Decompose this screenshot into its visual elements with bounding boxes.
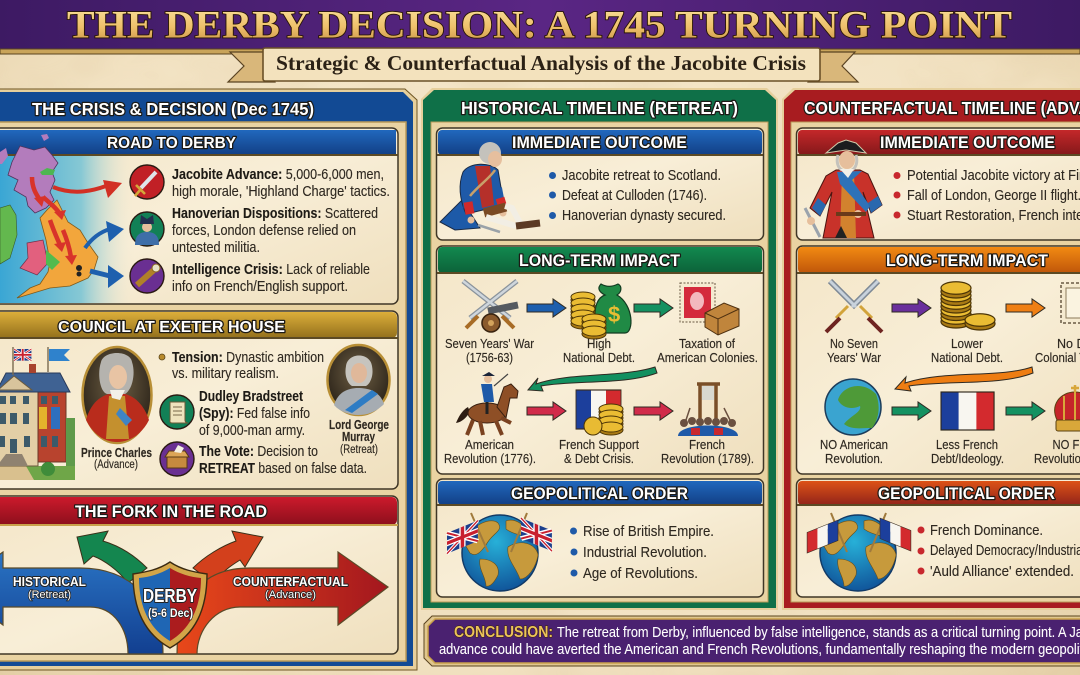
label: taxation (657, 336, 758, 365)
sub-panel: road to derby (0, 128, 398, 304)
icon: spyglass (130, 259, 164, 293)
label: seven years war: (1756-63) (466, 350, 513, 365)
heading: COUNCIL AT EXETER HOUSE (58, 319, 285, 336)
label: lower national debt: Lower (951, 336, 984, 351)
text: hanoverian dispositions (172, 206, 378, 256)
heading: ROAD TO DERBY (107, 135, 237, 152)
icon: coin stack (941, 282, 995, 330)
label: taxation: Taxation of (679, 336, 735, 351)
label: lord george murray (329, 417, 389, 456)
illustration: defeated soldier (440, 142, 540, 232)
arrow: green (634, 299, 673, 317)
text: jacobite advance (172, 167, 390, 200)
arrow: counterfactual road (177, 552, 388, 654)
label: seven years war (445, 336, 535, 365)
heading: GEOPOLITICAL ORDER (511, 485, 688, 503)
label: french support: & Debt Crisis. (564, 451, 634, 466)
subtitle: Strategic & Counterfactual Analysis of the Jacobite Crisis (276, 51, 806, 75)
text: intelligence crisis: info on French/English support. (172, 279, 348, 295)
arrow: orange (1006, 299, 1045, 317)
label: french revolution (661, 437, 754, 466)
label: french revolution: Revolution (1789). (661, 451, 754, 466)
bullet list: Industrial Revolution. (583, 545, 707, 561)
label: prince charles (81, 445, 152, 471)
icon: broken swords (826, 281, 882, 332)
conclusion banner (424, 616, 1080, 666)
road label: counterfactual: (Advance) (265, 589, 316, 601)
road label: historical (13, 574, 86, 601)
sub-panel: council at exeter house (0, 311, 398, 489)
label: seven years war: Seven Years' War (445, 336, 535, 351)
shield: derby: (5-6 Dec) (148, 606, 193, 620)
conclusion text (439, 624, 1080, 658)
icon: money bag and coins: $ (608, 302, 620, 327)
icon: ballot box (160, 442, 194, 476)
arrow: red up-right (193, 531, 263, 583)
icon: horse and rider (456, 372, 518, 435)
label: lower national debt (931, 336, 1003, 365)
portrait: lord george murray (328, 345, 390, 415)
panel heading: HISTORICAL TIMELINE (RETREAT) (461, 98, 738, 118)
panel: historical timeline (421, 88, 778, 610)
icon: money bag and coins (571, 284, 631, 339)
text: jacobite advance: Jacobite Advance: 5,000-6,000 men, (172, 167, 384, 183)
road label: historical: (Retreat) (28, 589, 71, 601)
arrow: blue (527, 299, 566, 317)
arrow: red 2 (634, 402, 673, 420)
heading: IMMEDIATE OUTCOME (880, 134, 1055, 152)
label: no american revolution (820, 437, 888, 466)
icon: globe with british flags (447, 513, 552, 591)
shield: derby (133, 562, 207, 648)
text: intelligence crisis (172, 262, 370, 295)
label: american revolution: American (465, 437, 514, 452)
text: the vote: RETREAT based on false data. (199, 461, 367, 477)
label: less french debt: Less French (936, 437, 998, 452)
bullet list: Defeat at Culloden (1746). (562, 188, 707, 204)
label: less french debt (931, 437, 1004, 466)
icon: europe globe (825, 379, 881, 435)
heading: THE FORK IN THE ROAD (75, 503, 267, 521)
label: american revolution (444, 437, 536, 466)
text: dudley bradstreet: Dudley Bradstreet (199, 389, 303, 405)
bullet list (570, 524, 714, 582)
icon: french flag and coins (576, 390, 623, 435)
label: taxation: American Colonies. (657, 350, 758, 365)
icon: soldier (130, 212, 164, 246)
label: lord george murray: (Retreat) (340, 444, 378, 456)
heading: IMMEDIATE OUTCOME (512, 134, 687, 152)
icon: blank stamp (1061, 283, 1080, 323)
icon: sword (130, 165, 164, 199)
label: high national debt (563, 336, 635, 365)
icon: crown (1055, 385, 1080, 431)
text: hanoverian dispositions: Hanoverian Dispositions: Scattered (172, 206, 378, 222)
bullet list: Age of Revolutions. (583, 566, 698, 582)
road label: counterfactual: COUNTERFACTUAL (233, 574, 348, 589)
text: the vote (199, 444, 367, 477)
label: no debt colonial taxation (1035, 336, 1080, 365)
bullet list: Jacobite retreat to Scotland. (562, 168, 721, 184)
sub-panel: the fork in the road (0, 496, 398, 654)
heading: LONG-TERM IMPACT (886, 252, 1048, 270)
heading: LONG-TERM IMPACT (519, 252, 680, 270)
bullet list (918, 523, 1080, 580)
portrait: prince charles (82, 347, 152, 443)
panel: the crisis and decision (0, 89, 417, 670)
bullet list: French Dominance. (930, 523, 1043, 539)
icon: guillotine and crowd (678, 384, 738, 436)
icon: scroll (160, 395, 194, 429)
arrow: green up-left (77, 531, 147, 583)
arrow: green 2 (1006, 402, 1045, 420)
text: hanoverian dispositions: forces, London defense relied on (172, 223, 356, 239)
label: high national debt: National Debt. (563, 350, 635, 365)
bullet list (894, 168, 1080, 224)
text: tension (159, 350, 324, 382)
sub-panel: long-term impact (796, 246, 1080, 474)
label: french revolution: French (689, 437, 725, 452)
label: lord george murray: Lord George (329, 417, 389, 432)
label: high national debt: High (587, 336, 611, 351)
arrow: curved green return (528, 367, 657, 391)
text: dudley bradstreet (199, 389, 310, 439)
label: french support: French Support (559, 437, 639, 452)
icon: globe with french flags (807, 513, 911, 591)
label: no american revolution: Revolution. (825, 451, 883, 466)
label: french support (559, 437, 639, 466)
arrow: historical road (0, 552, 163, 654)
map of Britain with arrows (0, 134, 135, 303)
label: no french revolution (1034, 437, 1080, 466)
label: lord george murray: Murray (342, 429, 376, 444)
panel: counterfactual timeline (782, 88, 1080, 610)
text: hanoverian dispositions: untested militia. (172, 240, 260, 256)
road label: historical: HISTORICAL (13, 574, 86, 589)
arrow: red 1 (527, 402, 566, 420)
bullet list: Rise of British Empire. (583, 524, 714, 540)
text: jacobite advance: high morale, 'Highland Charge' tactics. (172, 184, 390, 200)
text: the vote: The Vote: Decision to (199, 444, 318, 460)
arrow: green 1 (892, 402, 931, 420)
icon: crossed swords and cannon (463, 281, 518, 332)
label: prince charles: Prince Charles (81, 445, 152, 460)
text: dudley bradstreet: (Spy): Fed false info (199, 406, 310, 422)
text: tension: Tension: Dynastic ambition (172, 350, 324, 366)
label: lower national debt: National Debt. (931, 350, 1003, 365)
sub-panel: long-term impact (436, 246, 764, 474)
shield: derby: DERBY (143, 586, 197, 606)
label: no american revolution: NO American (820, 437, 888, 452)
panel heading: THE CRISIS & DECISION (Dec 1745) (32, 99, 314, 119)
text: intelligence crisis: Intelligence Crisis: Lack of reliable (172, 262, 370, 278)
text: tension: vs. military realism. (172, 366, 279, 382)
illustration: exeter house (0, 347, 75, 480)
arrow: curved orange return (895, 367, 1033, 391)
label: no seven years war: Years' War (827, 350, 882, 365)
label: american revolution: Revolution (1776). (444, 451, 536, 466)
road label: counterfactual (233, 574, 348, 601)
subtitle ribbon (228, 48, 858, 82)
header banner (0, 0, 1080, 54)
label: prince charles: (Advance) (94, 459, 138, 471)
label: no seven years war: No Seven (830, 336, 878, 351)
arrow: purple (892, 299, 931, 317)
label: no seven years war (827, 336, 882, 365)
illustration: victorious soldier (805, 140, 882, 238)
bullet list (549, 168, 726, 224)
conclusion text: CONCLUSION: (454, 624, 553, 641)
sub-panel: geopolitical order (796, 479, 1080, 597)
sub-panel: geopolitical order (436, 479, 764, 597)
text: dudley bradstreet: of 9,000-man army. (199, 423, 305, 439)
icon: stamp and chest (680, 283, 739, 335)
icon: french flag (941, 392, 994, 430)
heading: GEOPOLITICAL ORDER (878, 485, 1055, 503)
bullet list: Hanoverian dynasty secured. (562, 208, 726, 224)
sub-panel: immediate outcome (436, 128, 764, 240)
label: less french debt: Debt/Ideology. (931, 451, 1004, 466)
sub-panel: immediate outcome (796, 128, 1080, 240)
title: THE DERBY DECISION: A 1745 TURNING POINT (67, 4, 1012, 46)
